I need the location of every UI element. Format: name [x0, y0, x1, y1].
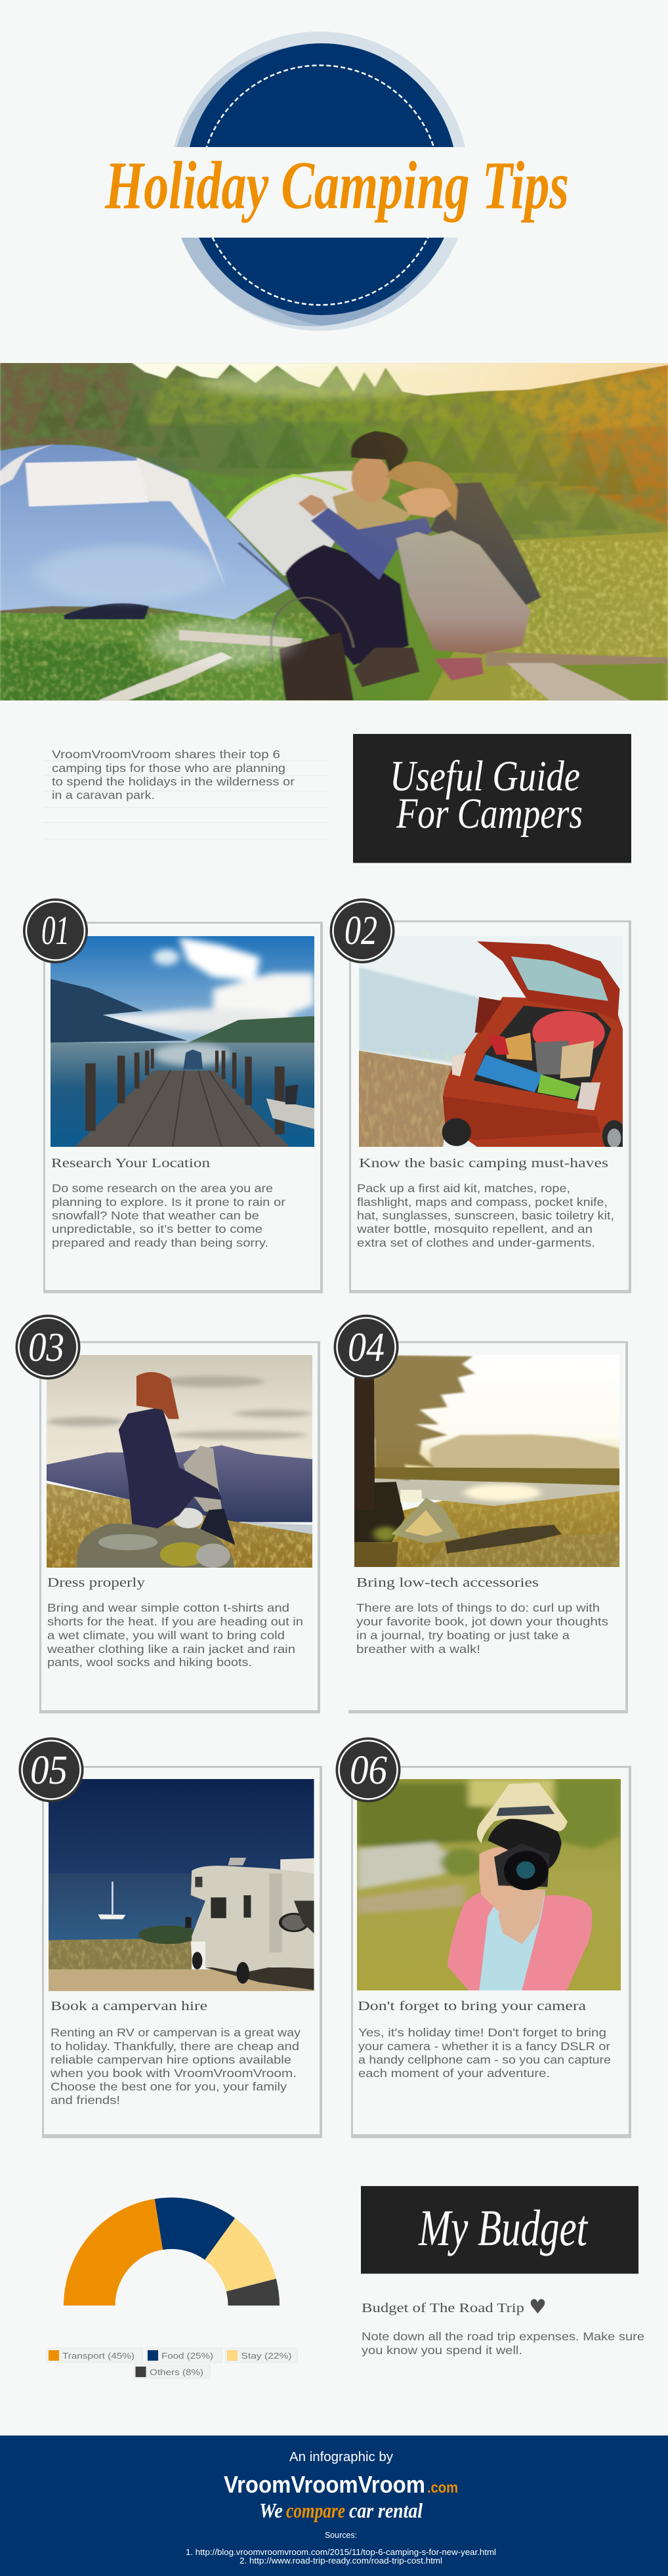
number badge 02: [329, 898, 395, 964]
sources: Sources:: [325, 2530, 357, 2540]
woman: [430, 483, 541, 606]
tip text: when you book with VroomVroomVroom.: [50, 2067, 297, 2080]
tip text: extra set of clothes and under-garments.: [357, 1236, 595, 1249]
heading: useful guide: Useful Guide: [390, 752, 580, 800]
legend: others: Others (8%): [150, 2367, 203, 2377]
footer: [0, 2436, 668, 2576]
budget subheading: Budget of The Road Trip: [362, 2301, 524, 2315]
tip heading: Dress properly: [47, 1576, 145, 1590]
legend: stay: [226, 2348, 298, 2363]
tip text: your camera - whether it is a fancy DSLR or: [358, 2040, 610, 2053]
tip text: and friends!: [51, 2093, 120, 2107]
budget note: Note down all the road trip expenses. Make sure: [362, 2330, 644, 2343]
number badge 01: [23, 898, 88, 964]
ruled lines: [43, 761, 329, 839]
number badge 05: [18, 1737, 84, 1803]
tip text: Pack up a first aid kit, matches, rope,: [357, 1182, 570, 1195]
logo: VroomVroomVroom.com: .com: [427, 2479, 458, 2496]
legend: stay: Stay (22%): [241, 2351, 291, 2361]
card frame: [348, 1342, 627, 1712]
slice: transport 45%: [64, 2199, 163, 2306]
heading: useful guide: For Campers: [396, 790, 583, 838]
tip text: snowfall? Note that weather can be: [52, 1209, 259, 1222]
legend: food: Food (25%): [161, 2351, 213, 2361]
logo tagline: car rental: [349, 2499, 423, 2522]
slice: others 8%: [226, 2279, 280, 2306]
sources: 2. http://www.road-trip-ready.com/road-trip-cost.html: [240, 2556, 442, 2565]
back tent: [228, 471, 358, 576]
tip text: hat, sunglasses, sunscreen, basic toiletry kit,: [357, 1209, 614, 1222]
photo: jetty on a lake: [51, 936, 314, 1147]
card frame: [45, 923, 322, 1292]
tip text: There are lots of things to do: curl up with: [356, 1601, 600, 1614]
logo tagline: [259, 2499, 423, 2522]
heading: useful guide: [353, 734, 631, 863]
chart legend: [47, 2348, 298, 2378]
front tent: [0, 445, 289, 619]
sky: [132, 363, 668, 396]
heading: my budget: [361, 2186, 638, 2274]
budget note: you know you spend it well.: [362, 2344, 522, 2357]
tip text: shorts for the heat. If you are heading out in: [47, 1615, 303, 1628]
tip text: a wet climate, you will want to bring cold: [47, 1629, 285, 1642]
slice: stay 22%: [205, 2218, 276, 2292]
photo: woman with a camera: [357, 1779, 621, 1990]
legend: others: [134, 2365, 210, 2378]
sources: [186, 2530, 496, 2565]
card frame: [41, 1342, 319, 1712]
hero photo: couple camping beside tents: [0, 363, 668, 700]
header badge with title: [104, 32, 569, 331]
number badge 04: 04: [348, 1325, 385, 1370]
panel: tip 03: [16, 1314, 320, 1713]
number badge 01: 01: [41, 909, 70, 953]
tip heading: Bring low-tech accessories: [356, 1576, 539, 1590]
tip text: pants, wool socks and hiking boots.: [47, 1656, 252, 1669]
tip text: to holiday. Thankfully, there are cheap and: [51, 2040, 299, 2053]
panel: tip 06: [336, 1737, 631, 2138]
intro text: to spend the holidays in the wilderness or: [52, 775, 295, 788]
tip text: planning to explore. Is it prone to rain or: [52, 1195, 285, 1209]
man: [285, 545, 409, 665]
tip text: Yes, it's holiday time! Don't forget to bring: [358, 2026, 606, 2039]
tip text: breather with a walk!: [356, 1642, 480, 1656]
tip text: Renting an RV or campervan is a great way: [51, 2026, 301, 2039]
logs, pot and campfire: [179, 630, 303, 648]
intro text: camping tips for those who are planning: [52, 762, 285, 775]
budget subheading: [362, 2296, 547, 2319]
panel: tip 01: [23, 898, 323, 1293]
tip text: Bring and wear simple cotton t-shirts and: [47, 1601, 289, 1614]
tip text: Do some research on the area you are: [52, 1182, 273, 1195]
legend: transport: Transport (45%): [62, 2351, 135, 2361]
tip text: in a journal, try boating or just take a: [356, 1629, 570, 1642]
tip text: each moment of your adventure.: [358, 2067, 550, 2080]
legend: food: [146, 2348, 222, 2363]
number badge 03: [16, 1314, 80, 1380]
chart: budget half donut: [64, 2197, 280, 2306]
logo tagline: We: [259, 2499, 283, 2522]
number badge 02: 02: [344, 909, 377, 953]
number badge 04: [333, 1314, 399, 1380]
logo: VroomVroomVroom.com: VroomVroomVroom: [224, 2471, 425, 2498]
logo tagline: compare: [286, 2499, 345, 2522]
photo: red car with luggage: [359, 936, 623, 1147]
credit line: An infographic by: [289, 2450, 393, 2464]
number badge 05: 05: [30, 1748, 68, 1793]
meadow: [426, 532, 668, 704]
tip heading: Book a campervan hire: [51, 1999, 207, 2013]
heading: my budget: My Budget: [418, 2199, 589, 2256]
slice: food 25%: [155, 2197, 235, 2260]
panel: tip 05: [18, 1737, 322, 2138]
number badge 06: [336, 1737, 400, 1803]
photo: tent by a lake at sunset: [354, 1355, 619, 1567]
badge: layered circles: [167, 32, 469, 331]
budget subheading: ♥: [529, 2296, 547, 2319]
sources: 1. http://blog.vroomvroomvroom.com/2015/11/top-6-camping-s-for-new-year.html: [186, 2547, 496, 2557]
tip text: Choose the best one for you, your family: [51, 2080, 287, 2093]
tip text: a handy cellphone cam - so you can capture: [358, 2053, 611, 2067]
forest trees: [30, 381, 639, 534]
card frame: [43, 1767, 321, 2137]
tip text: flashlight, maps and compass, pocket knife,: [357, 1195, 608, 1209]
card frame: [350, 922, 630, 1292]
tip heading: Don't forget to bring your camera: [358, 1999, 586, 2013]
panel: tip 04: [333, 1314, 628, 1713]
intro block: [43, 748, 329, 839]
tip text: water bottle, mosquito repellent, and an: [356, 1222, 593, 1235]
tip heading: Know the basic camping must-haves: [359, 1156, 608, 1170]
budget text block: [362, 2296, 648, 2357]
intro text: VroomVroomVroom shares their top 6: [52, 748, 280, 761]
tip text: your favorite book, jot down your thoughts: [356, 1615, 608, 1628]
number badge 06: 06: [350, 1748, 387, 1793]
tip heading: Research Your Location: [51, 1156, 210, 1170]
card frame: [352, 1767, 630, 2137]
intro text: in a caravan park.: [52, 788, 155, 802]
photo: campervan by the sea: [49, 1779, 314, 1991]
panel: tip 02: [329, 898, 631, 1293]
tip text: weather clothing like a rain jacket and rain: [47, 1642, 295, 1656]
tip text: unpredictable, so it’s better to come: [52, 1222, 262, 1235]
tip text: prepared and ready than being sorry.: [52, 1236, 268, 1249]
tip text: reliable campervan hire options available: [51, 2053, 291, 2067]
number badge 03: 03: [28, 1325, 64, 1370]
tree foliage: [366, 1355, 475, 1480]
legend: transport: [47, 2348, 143, 2363]
photo: woman on a hilltop: [47, 1355, 312, 1568]
